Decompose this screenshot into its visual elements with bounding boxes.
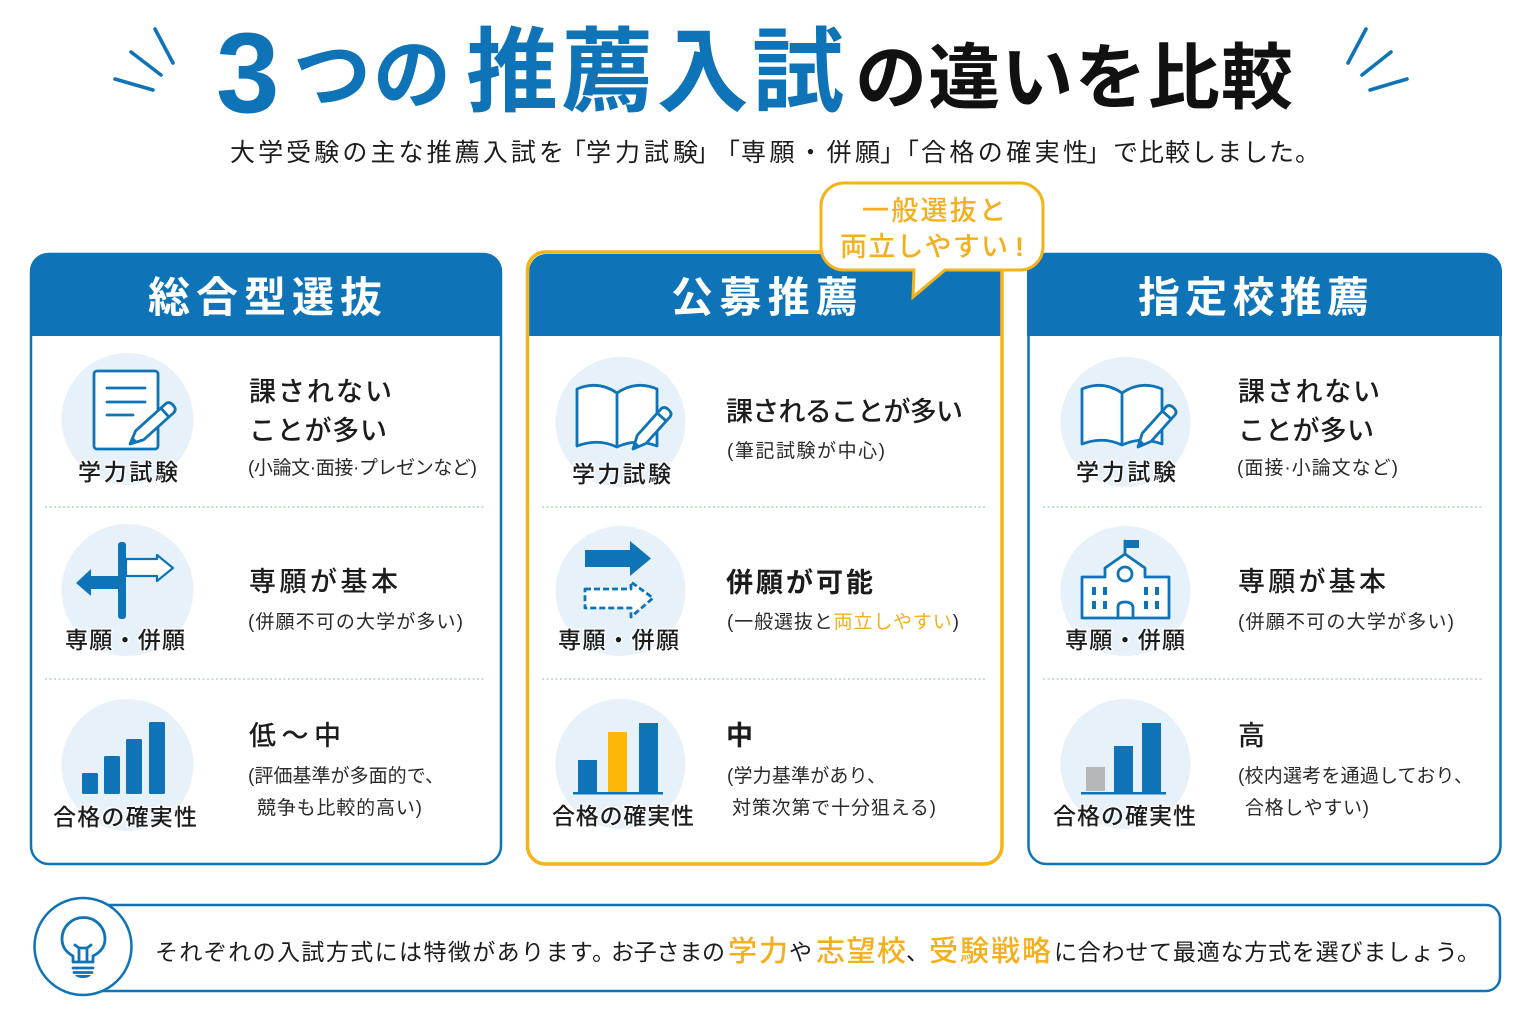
summary text: に合わせて最適な方式を選びましょう。	[1054, 939, 1480, 965]
callout: 一般選抜と両立しやすい: 一般選抜と	[862, 196, 1006, 226]
summary text: や	[789, 939, 812, 965]
text: 学力試験 summary: 課されることが多い	[726, 397, 963, 427]
text: 併願 summary	[726, 567, 959, 633]
callout: 一般選抜と両立しやすい	[821, 183, 1043, 297]
text: 学力試験 summary: (小論文·面接·プレゼンなど)	[248, 457, 477, 479]
text: 併願 summary: (一般選抜と両立しやすい)	[727, 611, 959, 633]
label: 専願・併願: 専願・併願	[558, 627, 679, 653]
text: 学力試験 summary: ことが多い	[1238, 416, 1374, 446]
label: 合格の確実性: 合格の確実性	[552, 803, 694, 829]
label: 合格の確実性: 合格の確実性	[53, 804, 197, 830]
subtitle: で比較しました。	[1113, 139, 1320, 167]
left spark lines	[115, 29, 173, 90]
right spark lines	[1348, 29, 1407, 90]
label: 専願・併願: 専願・併願	[65, 627, 185, 653]
icon: open book and pencil	[556, 357, 686, 487]
icon: signpost	[62, 524, 194, 656]
subtitle: 「	[894, 139, 919, 167]
text: 合格 summary: 競争も比較的高い)	[257, 797, 422, 819]
text: 合格 summary: 低～中	[249, 721, 341, 751]
icon: school building	[1060, 526, 1190, 656]
text: 専願 summary: (併願不可の大学が多い)	[1238, 611, 1454, 633]
text: 専願 summary: 専願が基本	[249, 567, 398, 597]
text: 専願 summary: (併願不可の大学が多い)	[248, 611, 463, 633]
text: 併願 summary: 併願が可能	[726, 567, 873, 598]
subtitle: 「	[715, 139, 740, 167]
summary text: 学力	[728, 935, 788, 968]
title: つの	[293, 31, 451, 119]
text: 学力試験 summary	[1237, 377, 1398, 479]
label: 学力試験: 学力試験	[78, 459, 178, 485]
icon: rising bars	[62, 699, 194, 831]
heading: 総合型選抜	[148, 274, 382, 321]
title: の違いを比較	[855, 39, 1293, 119]
text: 専願 summary	[1238, 567, 1454, 633]
title	[216, 10, 1293, 137]
summary bar	[34, 898, 1500, 995]
text: 合格 summary	[726, 721, 936, 819]
text: 専願 summary: 専願が基本	[1238, 567, 1386, 597]
label: 学力試験: 学力試験	[572, 461, 671, 487]
text: 合格 summary: 合格しやすい)	[1245, 797, 1369, 819]
icon: open book and pencil	[1060, 357, 1190, 487]
icon: light bulb	[34, 898, 132, 995]
title: 3	[216, 10, 279, 137]
subtitle: 学力試験	[586, 139, 698, 167]
text: 学力試験 summary: (筆記試験が中心)	[727, 440, 885, 462]
subtitle: 」	[695, 139, 720, 167]
summary text: 受験戦略	[929, 935, 1051, 968]
title: 推薦入試	[466, 22, 844, 124]
subtitle: 大学受験の主な推薦入試を	[230, 139, 564, 167]
subtitle: 「	[561, 139, 586, 167]
subtitle: 」	[1086, 139, 1111, 167]
text: 合格 summary: (評価基準が多面的で、	[248, 765, 444, 787]
icon: bars with gray low bar	[1060, 699, 1190, 829]
panel: 指定校推薦	[1027, 253, 1502, 864]
label: 学力試験: 学力試験	[1076, 459, 1176, 485]
text: 合格 summary	[1238, 721, 1473, 819]
text: 合格 summary: (学力基準があり、	[727, 765, 886, 787]
summary text: 志望校	[816, 935, 906, 968]
icon: solid and dashed arrows	[556, 526, 686, 656]
text: 合格 summary: 中	[726, 721, 753, 751]
heading: 指定校推薦	[1138, 274, 1369, 321]
summary text: それぞれの入試方式には特徴があります。	[155, 939, 615, 965]
subtitle: 」	[880, 139, 905, 167]
label: 合格の確実性: 合格の確実性	[1053, 803, 1196, 829]
text: 合格 summary: 対策次第で十分狙える)	[732, 797, 936, 819]
text: 学力試験 summary	[248, 377, 477, 479]
summary text: お子さまの	[611, 939, 725, 965]
summary text: 、	[906, 939, 929, 965]
subtitle: 合格の確実性	[921, 139, 1088, 167]
text: 専願 summary	[248, 567, 463, 633]
callout: 一般選抜と両立しやすい: !	[1015, 232, 1024, 262]
text: 学力試験 summary: 課されない	[1238, 377, 1380, 407]
label: 専願・併願: 専願・併願	[1065, 627, 1185, 653]
icon: document and pencil	[62, 353, 194, 485]
text: 合格 summary: 高	[1238, 721, 1265, 751]
text: 合格 summary	[248, 721, 444, 819]
text: 学力試験 summary: 課されない	[249, 377, 392, 407]
text: 学力試験 summary	[726, 397, 963, 462]
heading: 公募推薦	[671, 274, 858, 321]
icon: bars with yellow highlight	[556, 699, 686, 829]
subtitle: 専願・併願	[741, 139, 880, 167]
text: 学力試験 summary: ことが多い	[249, 416, 387, 446]
text: 学力試験 summary: (面接·小論文など)	[1237, 457, 1398, 479]
text: 合格 summary: (校内選考を通過しており、	[1238, 765, 1473, 787]
panel: 公募推薦	[528, 252, 1002, 864]
panel: 総合型選抜	[30, 253, 502, 864]
callout: 一般選抜と両立しやすい: 両立しやすい	[840, 232, 1008, 262]
